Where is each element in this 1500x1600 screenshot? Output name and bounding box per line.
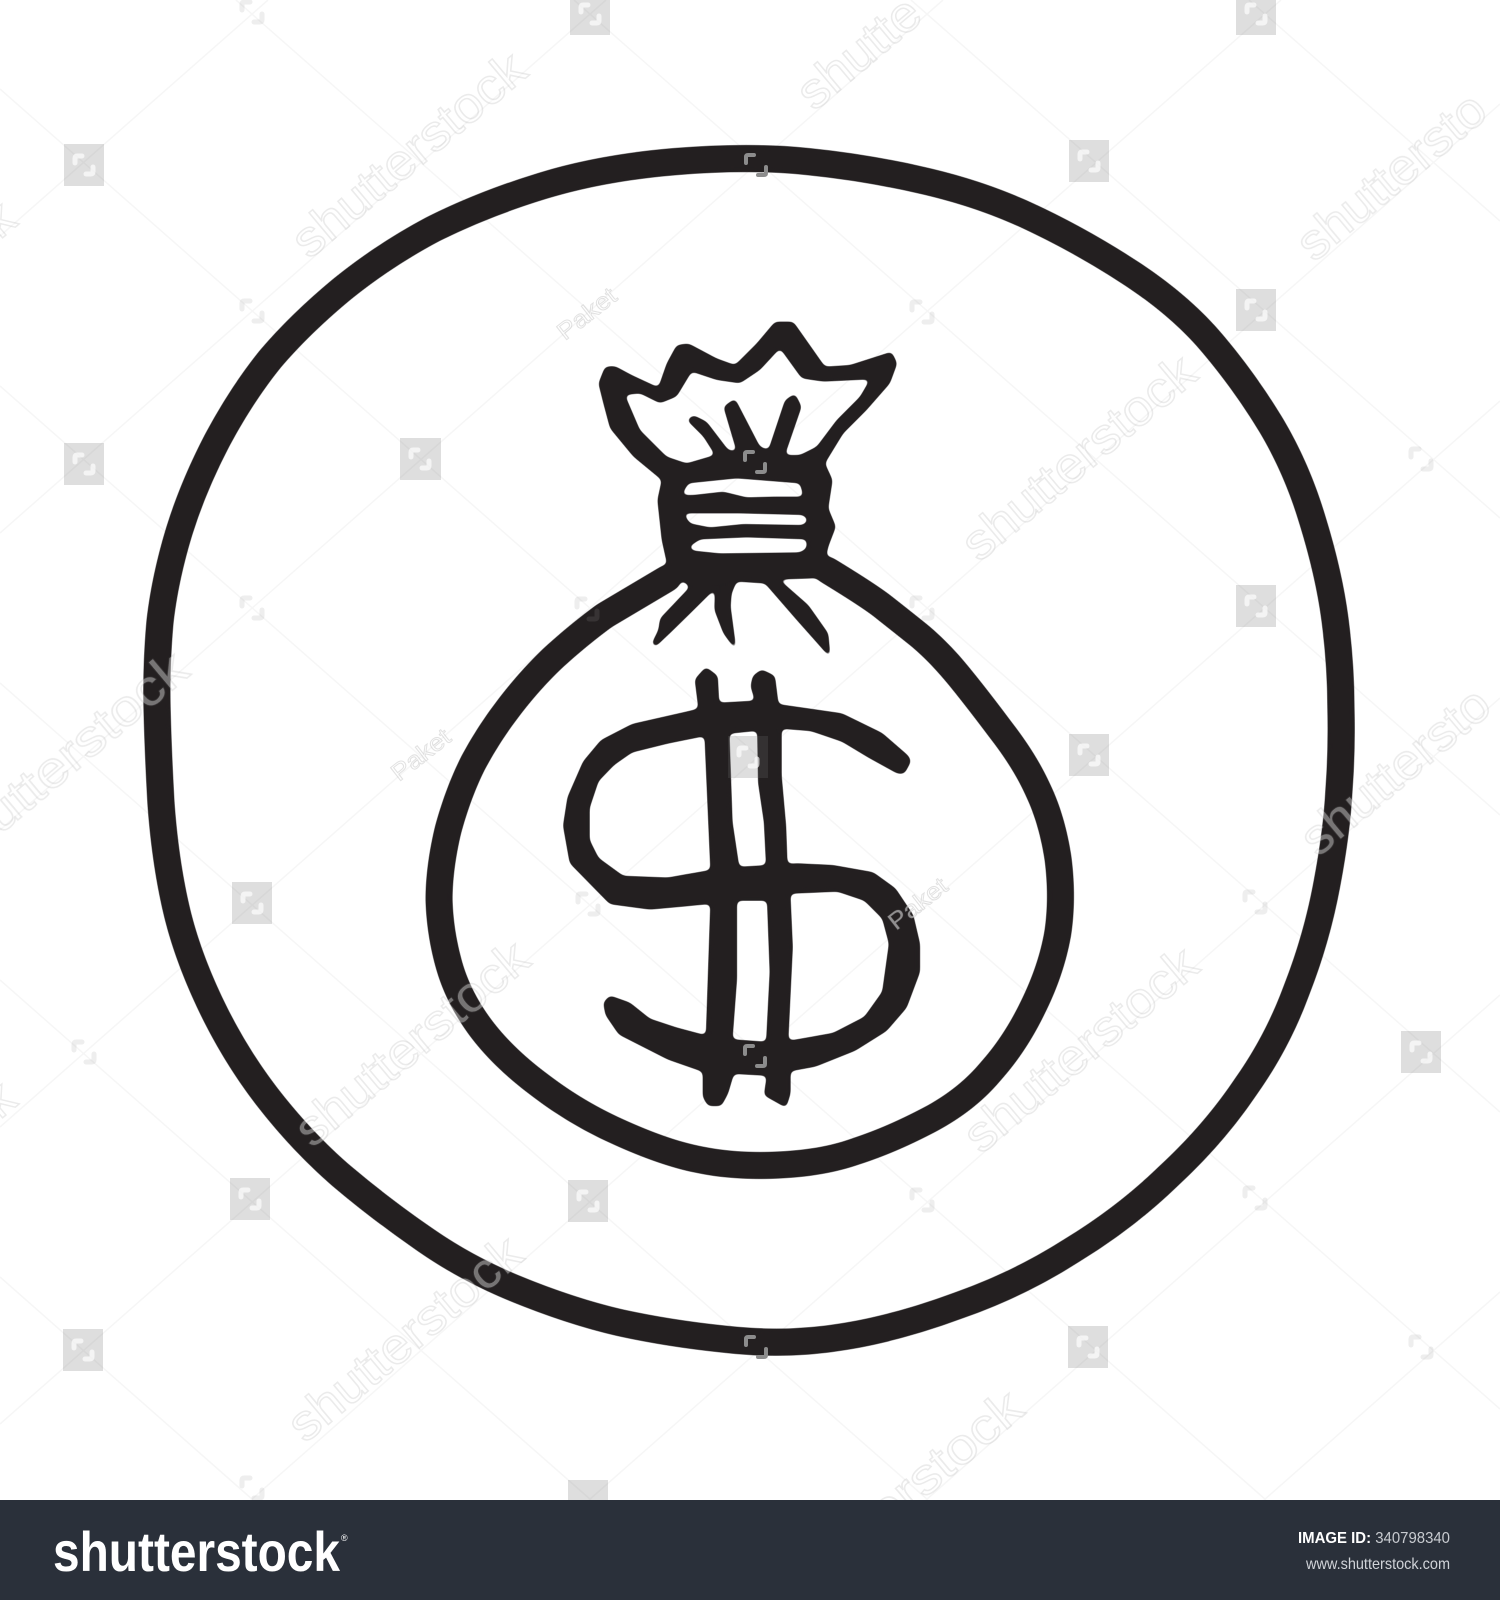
watermark small labels bbox=[386, 282, 954, 936]
dollar S curve bbox=[563, 701, 920, 1076]
image id: IMAGE ID: 340798340 bbox=[1298, 1530, 1450, 1547]
icon: money bag bbox=[439, 322, 1060, 1165]
bag body outline bbox=[439, 570, 1060, 1165]
dollar sign bbox=[563, 667, 920, 1108]
watermark wordmarks: shuttersto bbox=[1285, 81, 1497, 271]
watermark wordmarks: shutterstock bbox=[283, 929, 541, 1157]
footer bar bbox=[0, 1500, 1500, 1600]
footer logo: shutterstock bbox=[53, 1520, 341, 1583]
gather creases below the neck bbox=[652, 582, 831, 658]
watermark small labels: Paket bbox=[386, 723, 457, 787]
watermark wordmarks: tterstock bbox=[832, 1378, 1034, 1560]
watermark marks over the artwork bbox=[745, 155, 766, 1357]
watermark wordmarks: shuttersto bbox=[1289, 676, 1500, 866]
bag neck, ruffled top and tie bands bbox=[598, 322, 897, 658]
dollar vertical bars bbox=[695, 667, 793, 1108]
watermark wordmarks: shutterstock bbox=[276, 1224, 534, 1452]
watermark wordmarks: shutterstock bbox=[950, 343, 1208, 571]
hand-drawn circle frame bbox=[157, 159, 1341, 1342]
registered mark: ® bbox=[341, 1533, 348, 1543]
footer background bbox=[0, 1500, 1500, 1600]
watermark small labels: Paket bbox=[552, 282, 623, 346]
watermark wordmarks: shutterstock bbox=[952, 935, 1210, 1163]
watermark wordmarks: shutterstock bbox=[280, 40, 538, 268]
website: www.shutterstock.com bbox=[1305, 1556, 1450, 1573]
watermark marks inside squares bbox=[74, 5, 1430, 1359]
watermark small labels: Paket bbox=[883, 872, 954, 936]
